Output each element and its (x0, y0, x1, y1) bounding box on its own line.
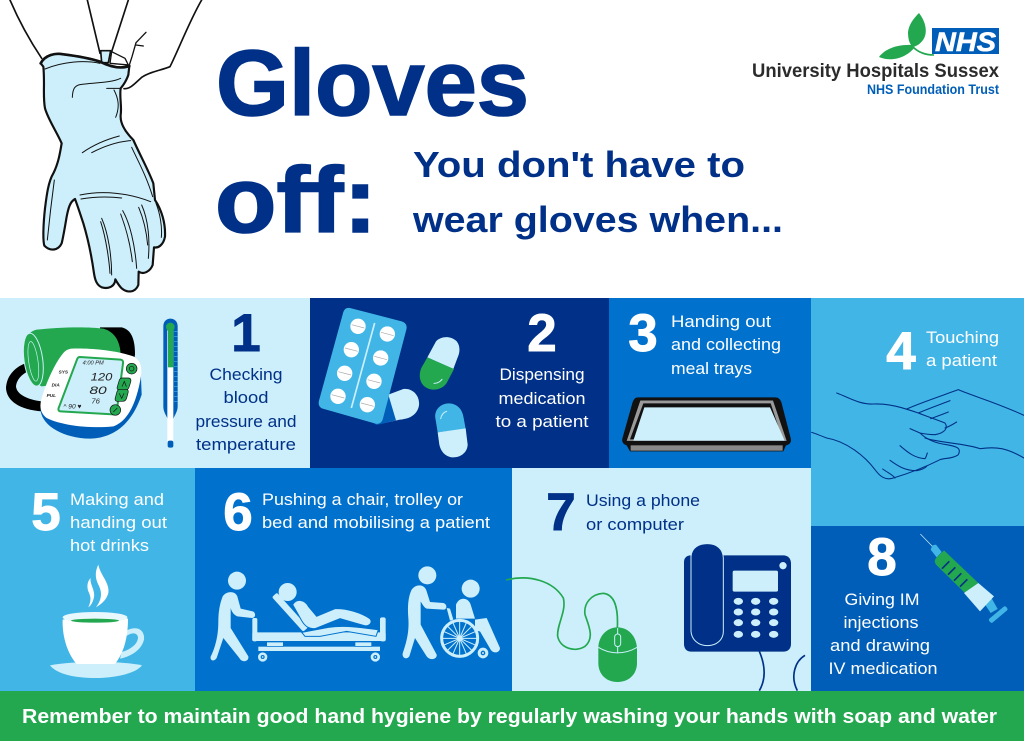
number 8: 8 (867, 528, 897, 587)
text: checking blood pressure and temperature: pressure and (196, 412, 296, 431)
text: making and handing out hot drinks: Making and (70, 490, 164, 509)
text: giving IM injections and drawing IV medication: IV medication (828, 659, 938, 678)
icon: thermometer (163, 319, 178, 448)
logo: University Hospitals Sussex NHS: University Hospitals Sussex (752, 61, 999, 82)
text: making and handing out hot drinks (70, 490, 167, 555)
panel 1: blood pressure and temperature (0, 298, 310, 468)
icon: blood pressure monitor: ^ 90 ♥ (63, 404, 82, 411)
title: Gloves off (215, 31, 529, 252)
text: checking blood pressure and temperature: Checking (210, 365, 282, 384)
text: making and handing out hot drinks: hot drinks (70, 536, 149, 555)
footer banner: Remember to maintain good hand hygiene by regularly washing your hands with soap and water (22, 706, 997, 728)
panel 4: touching a patient (811, 298, 1024, 526)
number 6: 6 (223, 483, 253, 542)
text: giving IM injections and drawing IV medication: injections (844, 613, 918, 632)
panel 2: dispensing medication (310, 298, 609, 468)
text: checking blood pressure and temperature: blood (224, 388, 268, 407)
icon: pills and blister pack (319, 308, 468, 457)
icon: blood pressure monitor: SYS (59, 369, 69, 374)
logo: University Hospitals Sussex NHS: NHS Foundation Trust (867, 82, 999, 97)
icon: cup of tea (50, 565, 144, 678)
title: Gloves off: off: (215, 148, 377, 252)
panel 8: injections (811, 526, 1024, 691)
text: using a phone or computer: or computer (586, 515, 684, 534)
text: touching a patient (926, 328, 999, 370)
text: dispensing medication to a patient: medication (498, 389, 586, 408)
panel 5: hot drinks (0, 468, 195, 691)
number 3: 3 (628, 304, 658, 363)
text: using a phone or computer: Using a phone (586, 491, 700, 510)
text: giving IM injections and drawing IV medication: and drawing (830, 636, 930, 655)
text: touching a patient: a patient (926, 351, 997, 370)
title: Gloves off: Gloves (216, 31, 529, 135)
number 2: 2 (527, 304, 557, 363)
number 7: 7 (546, 483, 576, 542)
icon: syringe (920, 534, 1008, 624)
icon: holding hands (812, 390, 1024, 479)
panel 3: meal trays (609, 298, 811, 468)
logo: University Hospitals Sussex NHS (752, 13, 999, 97)
icon: blood pressure monitor: 76 (91, 396, 101, 405)
subtitle: You don't have to (413, 144, 745, 185)
subtitle (412, 144, 783, 240)
icon: blood pressure monitor (6, 327, 142, 439)
text: handing out and collecting meal trays (671, 312, 781, 378)
text: checking blood pressure and temperature: temperature (196, 435, 296, 454)
icon: blood pressure monitor: 120 (91, 371, 113, 383)
icon: person pushing wheelchair (403, 566, 500, 659)
text: handing out and collecting meal trays: meal trays (671, 359, 752, 378)
text: pushing a chair, trolley or bed and mobilising a patient: Pushing a chair, trolley or (262, 490, 463, 509)
subtitle: wear gloves when... (412, 199, 783, 240)
icon: desk phone (684, 544, 805, 691)
text: dispensing medication to a patient: to a patient (496, 412, 589, 431)
text: dispensing medication to a patient: Dispensing (500, 365, 584, 384)
icon: blood pressure monitor: PUL (47, 393, 56, 398)
logo: University Hospitals Sussex NHS: NHS (935, 27, 996, 57)
text: making and handing out hot drinks: handing out (70, 513, 167, 532)
number 5: 5 (31, 483, 61, 542)
text: using a phone or computer (586, 491, 700, 534)
panel 6: pushing and mobilising (195, 468, 512, 691)
text: giving IM injections and drawing IV medication (828, 590, 938, 678)
panel 7: phone or computer (506, 468, 811, 691)
text: touching a patient: Touching (926, 328, 999, 347)
text: checking blood pressure and temperature (196, 365, 296, 454)
icon: blood pressure monitor: 4:00 PM (83, 361, 104, 367)
icon: meal tray (622, 397, 791, 451)
number 1: 1 (231, 304, 261, 363)
text: dispensing medication to a patient (496, 365, 589, 431)
icon: person pushing bed (211, 572, 386, 662)
icon: blood pressure monitor: DIA (52, 383, 60, 388)
icon: gloved hand (10, 0, 202, 291)
text: giving IM injections and drawing IV medication: Giving IM (844, 590, 920, 609)
icon: computer mouse (506, 578, 637, 682)
text: handing out and collecting meal trays: Handing out (671, 312, 771, 331)
text: handing out and collecting meal trays: and collecting (671, 335, 781, 354)
number 4: 4 (886, 322, 916, 381)
icon: blood pressure monitor: 80 (89, 385, 108, 397)
text: pushing a chair, trolley or bed and mobilising a patient (262, 490, 490, 532)
text: pushing a chair, trolley or bed and mobilising a patient: bed and mobilising a patient (262, 513, 490, 532)
footer banner (0, 691, 1024, 741)
